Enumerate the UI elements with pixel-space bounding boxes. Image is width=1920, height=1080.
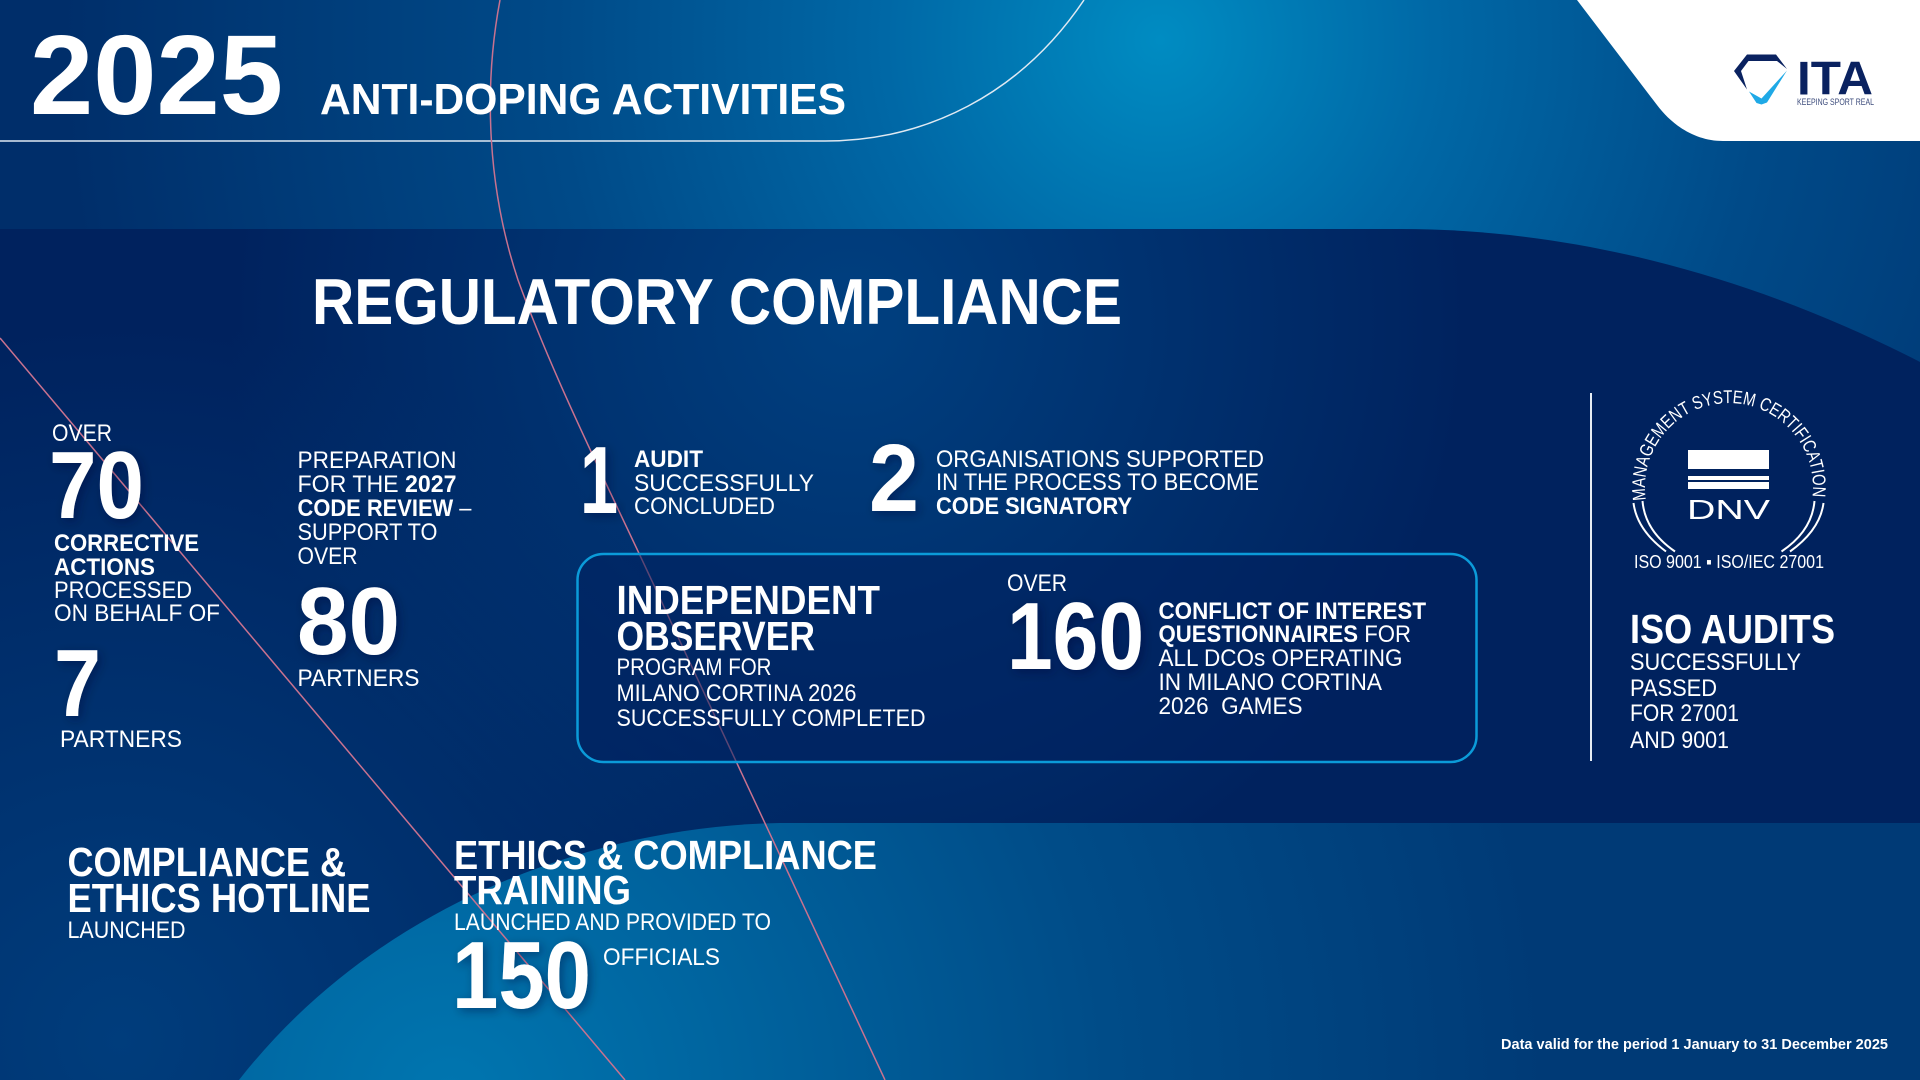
text: compliance and ethics hotline: LAUNCHED [68, 917, 186, 944]
stat: ISO audits passed: SUCCESSFULLY [1630, 649, 1801, 676]
number: 7: 7 [54, 630, 101, 737]
stat: over 70 corrective actions for 7 partners [49, 420, 220, 753]
text: conflict of interest questionnaires: CONFLICT OF INTEREST [1158, 598, 1426, 625]
logo panel: white corner [1577, 0, 1920, 141]
stat: 1 audit concluded: AUDIT [634, 446, 703, 473]
icon: DNV certification badge [1632, 390, 1826, 572]
text: program description: MILANO CORTINA 2026 [616, 680, 856, 707]
text: conflict of interest questionnaires: ALL DCOs OPERATING [1158, 645, 1402, 672]
stat: ISO audits passed: ISO AUDITS [1630, 606, 1835, 652]
number: 70: 70 [49, 432, 144, 539]
stat: 2 organisations supported [869, 425, 1264, 532]
stat: ISO audits passed [1630, 606, 1835, 754]
logo tagline: KEEPING SPORT REAL [1797, 97, 1874, 107]
stat: 2027 code review support to 80 partners: CODE REVIEW – [298, 495, 472, 522]
stat: 1 audit concluded: SUCCESSFULLY [634, 470, 814, 497]
stat: ISO audits passed: FOR 27001 [1630, 700, 1739, 727]
stat: ISO audits passed: PASSED [1630, 675, 1717, 702]
heading: independent observer: INDEPENDENT [616, 577, 880, 623]
text: ethics and compliance training: TRAINING [454, 867, 631, 913]
badge standards: ISO 9001 ▪ ISO/IEC 27001 [1634, 552, 1824, 572]
text: ethics and compliance training: LAUNCHED AND PROVIDED TO [454, 909, 771, 936]
stat: over 160: 160 [1007, 583, 1144, 690]
badge arcs [1634, 501, 1824, 552]
icon: ITA diamond check [1734, 54, 1787, 104]
stat: 2027 code review support to 80 partners: OVER [298, 543, 358, 570]
text: compliance and ethics hotline: ETHICS HOTLINE [68, 875, 370, 921]
background: lower curved shape [239, 823, 1920, 1080]
stat: over 70 corrective actions for 7 partners: ON BEHALF OF [54, 600, 220, 627]
stat: 1 audit concluded [580, 427, 814, 534]
badge bars [1688, 450, 1769, 489]
panel: independent observer and questionnaires [578, 554, 1476, 762]
pink curved line [490, 0, 885, 1080]
stat: 2027 code review support to 80 partners: PREPARATION [298, 447, 456, 474]
background: dark middle band [0, 229, 1920, 1080]
heading: independent observer [616, 577, 880, 659]
text: compliance and ethics hotline: COMPLIANCE & [68, 839, 346, 885]
title: year: 2025 [30, 12, 283, 138]
stat: over 70 corrective actions for 7 partners: PARTNERS [60, 726, 182, 753]
text: conflict of interest questionnaires: QUESTIONNAIRES FOR [1158, 621, 1411, 648]
text: program description: PROGRAM FOR [616, 654, 772, 681]
stat: 2027 code review support to 80 partners: SUPPORT TO [298, 519, 438, 546]
stat: 2027 code review support to 80 partners: PARTNERS [298, 665, 420, 692]
stat: over 70 corrective actions for 7 partners: PROCESSED [54, 577, 192, 604]
stat: ISO audits passed: AND 9001 [1630, 727, 1729, 754]
stat: over 70 corrective actions for 7 partners: CORRECTIVE [54, 530, 199, 557]
number: 80: 80 [297, 568, 400, 675]
badge wordmark: DNV [1687, 494, 1770, 525]
text: ethics and compliance training: OFFICIALS [603, 944, 720, 971]
number: 150: 150 [452, 922, 591, 1029]
stat: over 160: OVER [1007, 570, 1067, 597]
text: conflict of interest questionnaires: 2026 GAMES [1158, 693, 1302, 720]
text: conflict of interest questionnaires [1158, 598, 1426, 720]
heading: regulatory compliance: REGULATORY COMPLIANCE [312, 265, 1122, 338]
logo wordmark: ITA [1797, 52, 1873, 104]
text: program description [616, 654, 926, 732]
stat: 2027 code review support to 80 partners [297, 447, 472, 692]
pink diagonal line [0, 338, 625, 1080]
divider: vertical rule [1590, 393, 1592, 761]
text: program description: SUCCESSFULLY COMPLETED [616, 705, 926, 732]
text: ethics and compliance training: ETHICS & COMPLIANCE [454, 832, 877, 878]
stat: 2 organisations supported: IN THE PROCESS TO BECOME [936, 469, 1259, 496]
text: ethics and compliance training [452, 832, 877, 1029]
number: 1: 1 [580, 427, 618, 534]
stat: over 70 corrective actions for 7 partners: ACTIONS [54, 554, 155, 581]
number: 2: 2 [869, 425, 919, 532]
text: conflict of interest questionnaires: IN MILANO CORTINA [1158, 669, 1383, 696]
text: compliance and ethics hotline [68, 839, 370, 944]
stat: 2 organisations supported: ORGANISATIONS SUPPORTED [936, 446, 1264, 473]
stat: 1 audit concluded: CONCLUDED [634, 493, 775, 520]
stat: 2027 code review support to 80 partners: FOR THE 2027 [298, 471, 456, 498]
badge curved text: MANAGEMENT SYSTEM CERTIFICATION [1632, 390, 1826, 500]
heading: independent observer: OBSERVER [616, 613, 815, 659]
stat: 2 organisations supported: CODE SIGNATORY [936, 493, 1132, 520]
footnote: data period: Data valid for the period 1 January to 31 December 2025 [1501, 1036, 1888, 1053]
stat: over 70 corrective actions for 7 partners: OVER [52, 420, 112, 447]
header rule with curve [0, 0, 1084, 141]
title: anti-doping activities: ANTI-DOPING ACTIVITIES [320, 75, 846, 124]
